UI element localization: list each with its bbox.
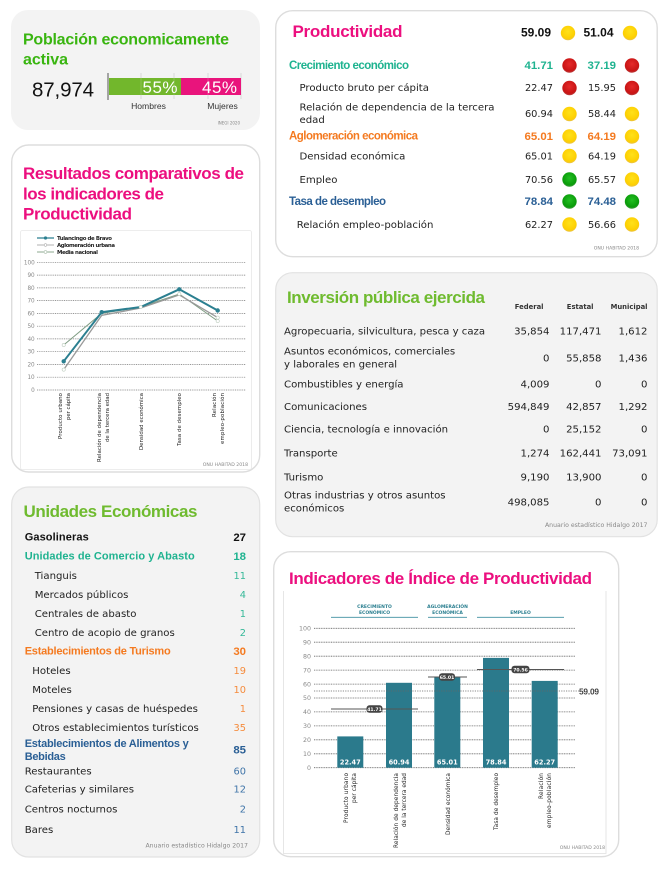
chart legend: Media nacional: [57, 250, 98, 256]
panel: resultados comparativos: [12, 145, 260, 472]
row group: aglomeración económica: 70.56: [525, 175, 553, 186]
axis labels: Tasa de desempleo: [494, 773, 500, 831]
bar values: 60.94: [389, 758, 410, 766]
investment table: 498,085: [508, 498, 550, 508]
bar chart: indicadores: 20: [303, 737, 311, 744]
source note: ONU HABITAD 2018: [560, 845, 605, 851]
bars: [337, 658, 558, 768]
group: turismo: 30: [233, 646, 246, 658]
heading: población economicamente activa: [23, 32, 229, 68]
axis labels: de la tercera edad: [402, 773, 408, 827]
chart axis labels: Producto urbano: [58, 393, 64, 439]
group averages: 65.01: [440, 675, 454, 681]
row group: aglomeración económica: Aglomeración económica: [289, 130, 419, 142]
bar chart: indicadores: 90: [303, 639, 311, 646]
bar chart: indicadores: 80: [303, 653, 311, 660]
group averages: 70.56: [513, 667, 528, 673]
investment table: 162,441: [560, 448, 602, 460]
gender split bar: Hombres: [131, 101, 166, 111]
row: gasolineras: [25, 532, 246, 544]
row group: aglomeración económica: Densidad económica: [300, 150, 405, 162]
bar chart: indicadores: 50: [303, 695, 311, 702]
gender split bar: Mujeres: [207, 101, 238, 111]
row group: crecimiento económico: Producto bruto per cápita: [300, 82, 429, 94]
row group: crecimiento económico: edad: [300, 115, 325, 126]
group: comercio y abasto: Centrales de abasto: [35, 609, 136, 620]
row group: crecimiento económico: Crecimiento económico: [289, 60, 409, 72]
row group: tasa de desempleo: 62.27: [525, 220, 553, 231]
line chart: comparativo: 80: [27, 286, 35, 292]
category headers: ECONÓMICA: [432, 609, 463, 616]
investment table: 0: [543, 424, 550, 436]
investment table: Otras industrias y otros asuntos: [284, 490, 446, 502]
group: alimentos y bebidas: 11: [234, 825, 246, 836]
bar values: 22.47: [340, 758, 361, 766]
investment table: 117,471: [560, 326, 602, 338]
row group: crecimiento económico: [289, 58, 639, 126]
investment table: 42,857: [566, 402, 602, 413]
chart axis labels: Densidad económica: [138, 393, 145, 450]
line chart: comparativo: 20: [27, 362, 35, 368]
line chart: comparativo: 30: [27, 350, 35, 356]
group: alimentos y bebidas: 2: [240, 804, 246, 816]
bar chart: indicadores: [284, 591, 606, 854]
group: alimentos y bebidas: Restaurantes: [25, 766, 92, 778]
investment table: 0: [641, 380, 648, 390]
group: comercio y abasto: Centro de acopio de granos: [35, 628, 175, 639]
group: alimentos y bebidas: [25, 738, 247, 836]
chart axis labels: Relación: [211, 393, 218, 417]
line chart: comparativo: 100: [24, 260, 35, 266]
group: turismo: Establecimientos de Turismo: [25, 646, 171, 658]
gender split bar: [108, 73, 241, 111]
bar values: 65.01: [437, 758, 458, 766]
investment table: 35,854: [514, 326, 550, 338]
row group: crecimiento económico: 37.19: [587, 60, 616, 72]
row group: crecimiento económico: Relación de dependencia de la tercera: [300, 102, 494, 114]
line chart: comparativo: 0: [31, 388, 35, 394]
group: turismo: Moteles: [32, 685, 72, 696]
chart axis labels: per cápita: [65, 393, 72, 420]
gender split bar: 55%: [142, 78, 178, 97]
bar chart: indicadores: 40: [303, 709, 311, 716]
row group: tasa de desempleo: Relación empleo-población: [297, 219, 433, 231]
investment table: 1,274: [520, 448, 550, 460]
line chart: comparativo: 70: [27, 299, 35, 305]
line chart: comparativo: 50: [27, 324, 35, 330]
group: alimentos y bebidas: Establecimientos de Alimentos y: [25, 738, 190, 750]
investment table: Agropecuaria, silvicultura, pesca y caza: [284, 326, 485, 338]
chart legend: Aglomeración urbana: [57, 242, 115, 249]
investment table: Ciencia, tecnología e innovación: [284, 424, 448, 436]
headline scores: [521, 26, 637, 40]
source note: Anuario estadístico Hidalgo 2017: [545, 521, 648, 529]
gender split bar: 45%: [202, 78, 237, 97]
row group: tasa de desempleo: Tasa de desempleo: [289, 196, 386, 208]
panel: unidades económicas: [12, 487, 260, 857]
axis labels: per cápita: [351, 773, 358, 803]
row group: tasa de desempleo: 78.84: [524, 196, 554, 208]
group: comercio y abasto: Unidades de Comercio y Abasto: [25, 551, 195, 563]
group: comercio y abasto: [25, 551, 246, 639]
investment table: 1,436: [618, 354, 648, 364]
investment table: 594,849: [508, 402, 550, 413]
investment table: [283, 326, 648, 514]
group: alimentos y bebidas: Bares: [25, 825, 53, 836]
investment table: 0: [641, 424, 648, 436]
heading: productividad: Productividad: [292, 22, 402, 41]
group averages: 41.71: [367, 707, 382, 713]
investment table: 0: [641, 498, 648, 508]
row group: aglomeración económica: 65.57: [588, 175, 616, 186]
group: alimentos y bebidas: Cafeterias y similares: [25, 784, 134, 796]
investment table: 73,091: [612, 448, 648, 460]
group: comercio y abasto: Mercados públicos: [35, 589, 128, 601]
group: alimentos y bebidas: Bebidas: [25, 751, 66, 763]
heading: inversión pública ejercida: Inversión pública ejercida: [287, 288, 486, 307]
group: turismo: 35: [234, 723, 246, 734]
row: gasolineras: 27: [233, 532, 246, 544]
investment table: económicos: [284, 502, 344, 514]
group: turismo: Pensiones y casas de huéspedes: [32, 703, 198, 715]
row: gasolineras: Gasolineras: [25, 532, 89, 544]
group: alimentos y bebidas: 85: [233, 744, 247, 756]
group averages: [331, 666, 564, 713]
bar values: 62.27: [534, 758, 556, 766]
investment table: 1,292: [618, 402, 648, 413]
row group: aglomeración económica: [289, 129, 639, 187]
group: comercio y abasto: 18: [233, 551, 246, 563]
group: turismo: Otros establecimientos turísticos: [32, 722, 199, 734]
source note: ONU HABITAD 2018: [594, 246, 639, 252]
group: comercio y abasto: Tianguis: [34, 571, 77, 582]
row group: tasa de desempleo: 74.48: [587, 196, 616, 208]
row group: aglomeración económica: 65.01: [525, 152, 553, 162]
group: turismo: 10: [234, 685, 246, 696]
bar chart: indicadores: 10: [303, 751, 311, 758]
column headers: Federal: [515, 303, 544, 311]
column headers: [515, 303, 648, 311]
heading: resultados comparativos: [23, 164, 244, 224]
average 59.09 line: 59.09: [579, 686, 599, 696]
group: comercio y abasto: 1: [240, 609, 246, 620]
row group: crecimiento económico: 58.44: [588, 109, 616, 120]
chart axis labels: Tasa de desempleo: [177, 393, 183, 447]
heading: resultados comparativos: los indicadores de: [23, 184, 164, 204]
line chart: comparativo: 60: [27, 311, 35, 317]
heading: unidades económicas: Unidades Económicas: [24, 502, 198, 521]
row group: crecimiento económico: 60.94: [525, 109, 553, 120]
axis labels: Relación de dependencia: [393, 773, 400, 848]
investment table: 55,858: [566, 354, 602, 364]
group: alimentos y bebidas: Centros nocturnos: [25, 804, 117, 816]
panel: productividad: [276, 11, 657, 257]
panel: población economicamente activa: [11, 10, 260, 130]
heading: población economicamente activa: Población economicamente: [23, 32, 229, 48]
investment table: 0: [543, 354, 550, 364]
category headers: ECONÓMICO: [359, 609, 390, 616]
chart axis labels: [58, 393, 226, 462]
source note: Anuario estadístico Hidalgo 2017: [145, 842, 248, 850]
group: turismo: 1: [240, 704, 246, 715]
heading: población economicamente activa: activa: [23, 52, 68, 68]
headline scores: 59.09: [521, 26, 551, 40]
group: comercio y abasto: 11: [234, 571, 246, 582]
investment table: Transporte: [283, 448, 338, 460]
investment table: 0: [595, 380, 602, 390]
row group: aglomeración económica: 64.19: [587, 131, 616, 143]
axis labels: empleo-población: [546, 773, 553, 828]
line chart: comparativo: [20, 230, 252, 470]
row group: crecimiento económico: 41.71: [524, 60, 554, 72]
row group: aglomeración económica: 65.01: [524, 131, 554, 143]
chart source note: ONU HABITAD 2018: [203, 462, 248, 468]
chart axis labels: de la tercera edad: [105, 393, 111, 442]
group: turismo: Hoteles: [32, 666, 71, 677]
chart legend: Tulancingo de Bravo: [57, 236, 112, 242]
axis labels: [344, 773, 553, 848]
line chart: comparativo: 90: [27, 273, 35, 279]
category headers: CRECIMIENTO: [357, 604, 392, 610]
group: turismo: [25, 646, 246, 734]
bar chart: indicadores: 60: [303, 681, 311, 688]
panel: indicadores de índice de productividad: [274, 552, 619, 857]
total population figure: 87,974: [32, 78, 94, 102]
heading: indicadores de índice de productividad: Indicadores de Índice de Productividad: [289, 569, 592, 588]
group: alimentos y bebidas: 60: [234, 766, 246, 778]
group: comercio y abasto: 4: [240, 590, 246, 601]
axis labels: Relación: [538, 773, 545, 799]
investment table: Comunicaciones: [284, 402, 367, 413]
row group: aglomeración económica: 64.19: [588, 152, 616, 162]
chart legend: [37, 236, 115, 256]
group: alimentos y bebidas: 12: [234, 784, 246, 796]
investment table: Asuntos económicos, comerciales: [284, 346, 455, 358]
investment table: 13,900: [566, 472, 602, 484]
investment table: 0: [641, 472, 648, 484]
column headers: Municipal: [611, 303, 648, 311]
bar chart: indicadores: 100: [299, 626, 311, 632]
panel: inversión pública ejercida: [276, 273, 657, 537]
bar chart: indicadores: 0: [307, 765, 311, 772]
axis labels: Densidad económica: [445, 773, 452, 835]
row group: crecimiento económico: 22.47: [525, 83, 553, 94]
chart axis labels: empleo-población: [219, 393, 226, 444]
row group: aglomeración económica: Empleo: [300, 175, 337, 186]
axis labels: Producto urbano: [344, 773, 350, 823]
category headers: EMPLEO: [510, 610, 531, 616]
group: comercio y abasto: 2: [240, 628, 246, 639]
bar chart: indicadores: 70: [303, 667, 311, 674]
chart axis labels: Relación de dependencia: [96, 393, 103, 462]
heading: resultados comparativos: Resultados comparativos de: [23, 164, 244, 183]
column headers: Estatal: [567, 303, 594, 311]
investment table: 9,190: [520, 472, 550, 484]
line chart: comparativo: 40: [27, 337, 35, 343]
row group: tasa de desempleo: [289, 194, 639, 232]
heading: resultados comparativos: Productividad: [23, 204, 132, 224]
bar values: 78.84: [486, 758, 507, 766]
bar chart: indicadores: 30: [303, 723, 311, 730]
group: turismo: 19: [234, 666, 246, 677]
row group: tasa de desempleo: 56.66: [588, 220, 616, 231]
row group: crecimiento económico: 15.95: [588, 83, 616, 94]
investment table: Combustibles y energía: [284, 378, 404, 390]
investment table: 4,009: [520, 380, 550, 390]
bar values: [340, 758, 556, 766]
investment table: 1,612: [618, 326, 648, 338]
headline scores: 51.04: [583, 26, 614, 40]
line chart: comparativo: 10: [27, 375, 35, 381]
category headers: [331, 603, 564, 617]
investment table: Turismo: [283, 472, 323, 484]
investment table: 0: [595, 498, 602, 508]
investment table: 25,152: [566, 424, 602, 436]
investment table: y laborales en general: [284, 360, 397, 370]
source note: INEGI 2020: [218, 120, 240, 126]
category headers: AGLOMERACIÓN: [427, 603, 468, 610]
